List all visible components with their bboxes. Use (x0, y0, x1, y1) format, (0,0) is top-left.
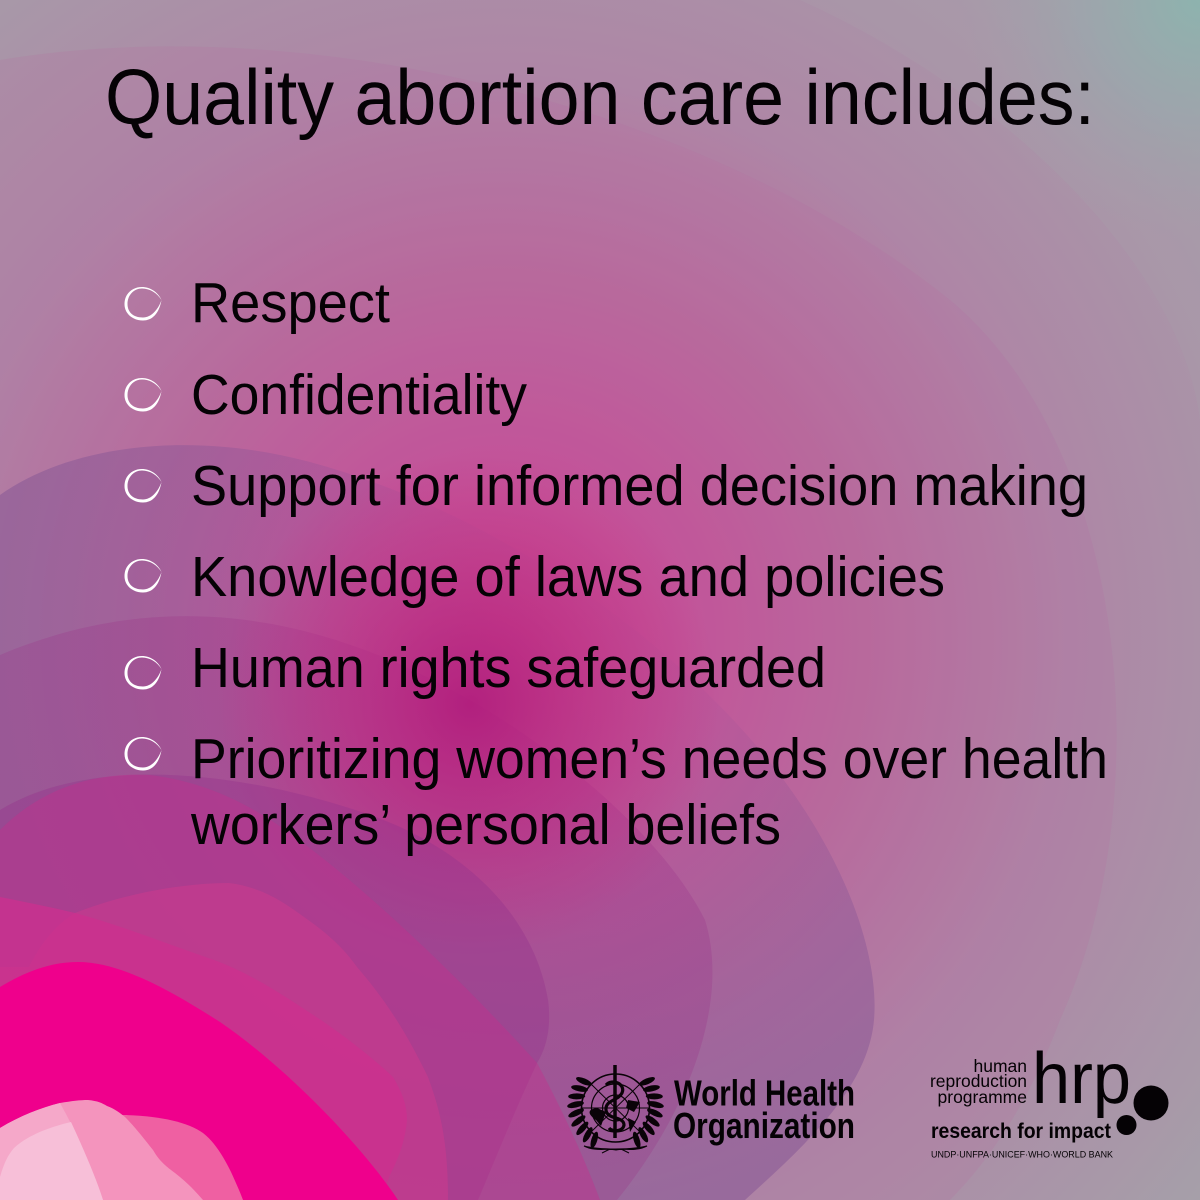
bullet icon (124, 559, 162, 592)
dots (1116, 1086, 1168, 1135)
bullet icon (124, 737, 162, 770)
programme name (930, 1056, 1027, 1107)
central dark purple petal (0, 775, 549, 1200)
tagline: research for impact (931, 1120, 1111, 1143)
item: respect: Respect (191, 271, 390, 335)
pink upper petal (0, 883, 448, 1200)
bullet icon (124, 378, 162, 412)
middle purple petal (0, 616, 712, 1200)
bullet icon (124, 287, 162, 320)
title: Quality abortion care includes: (105, 53, 1095, 141)
HRP logo (930, 1039, 1168, 1160)
rose petal (30, 1115, 243, 1200)
programme name: programme (938, 1087, 1027, 1107)
item: human rights: Human rights safeguarded (191, 636, 826, 700)
organization name: World Health (674, 1072, 855, 1114)
bullet list (124, 271, 1108, 857)
bullet icon (124, 469, 162, 502)
WHO logo: Organization (673, 1105, 855, 1146)
hot pink petal (0, 962, 398, 1200)
pink lower petal (0, 897, 407, 1200)
item: prioritizing women: workers’ personal beliefs (190, 793, 781, 857)
abstract petal shapes (0, 445, 875, 1200)
WHO logo (567, 1065, 855, 1153)
pale left petal (0, 1103, 103, 1200)
centre magenta glow (220, 455, 720, 955)
programme name: human (973, 1056, 1027, 1076)
light pink petal (0, 1100, 203, 1200)
bullet icon (124, 656, 162, 690)
pale pink overlap (0, 1122, 103, 1200)
pink outer petal (0, 775, 600, 1200)
item: confidentiality: Confidentiality (191, 363, 527, 427)
item: prioritizing women (124, 727, 1108, 857)
partners: UNDP·UNFPA·UNICEF·WHO·WORLD BANK (931, 1150, 1114, 1160)
hrp wordmark: hrp (1032, 1039, 1131, 1119)
item: prioritizing women: Prioritizing women’s needs over health (191, 727, 1108, 791)
outer purple petal (0, 445, 875, 1200)
item: informed decision making: Support for informed decision making (191, 454, 1088, 518)
programme name: reproduction (930, 1071, 1027, 1091)
item: knowledge of laws: Knowledge of laws and policies (191, 545, 945, 609)
icon: WHO emblem (567, 1065, 664, 1153)
